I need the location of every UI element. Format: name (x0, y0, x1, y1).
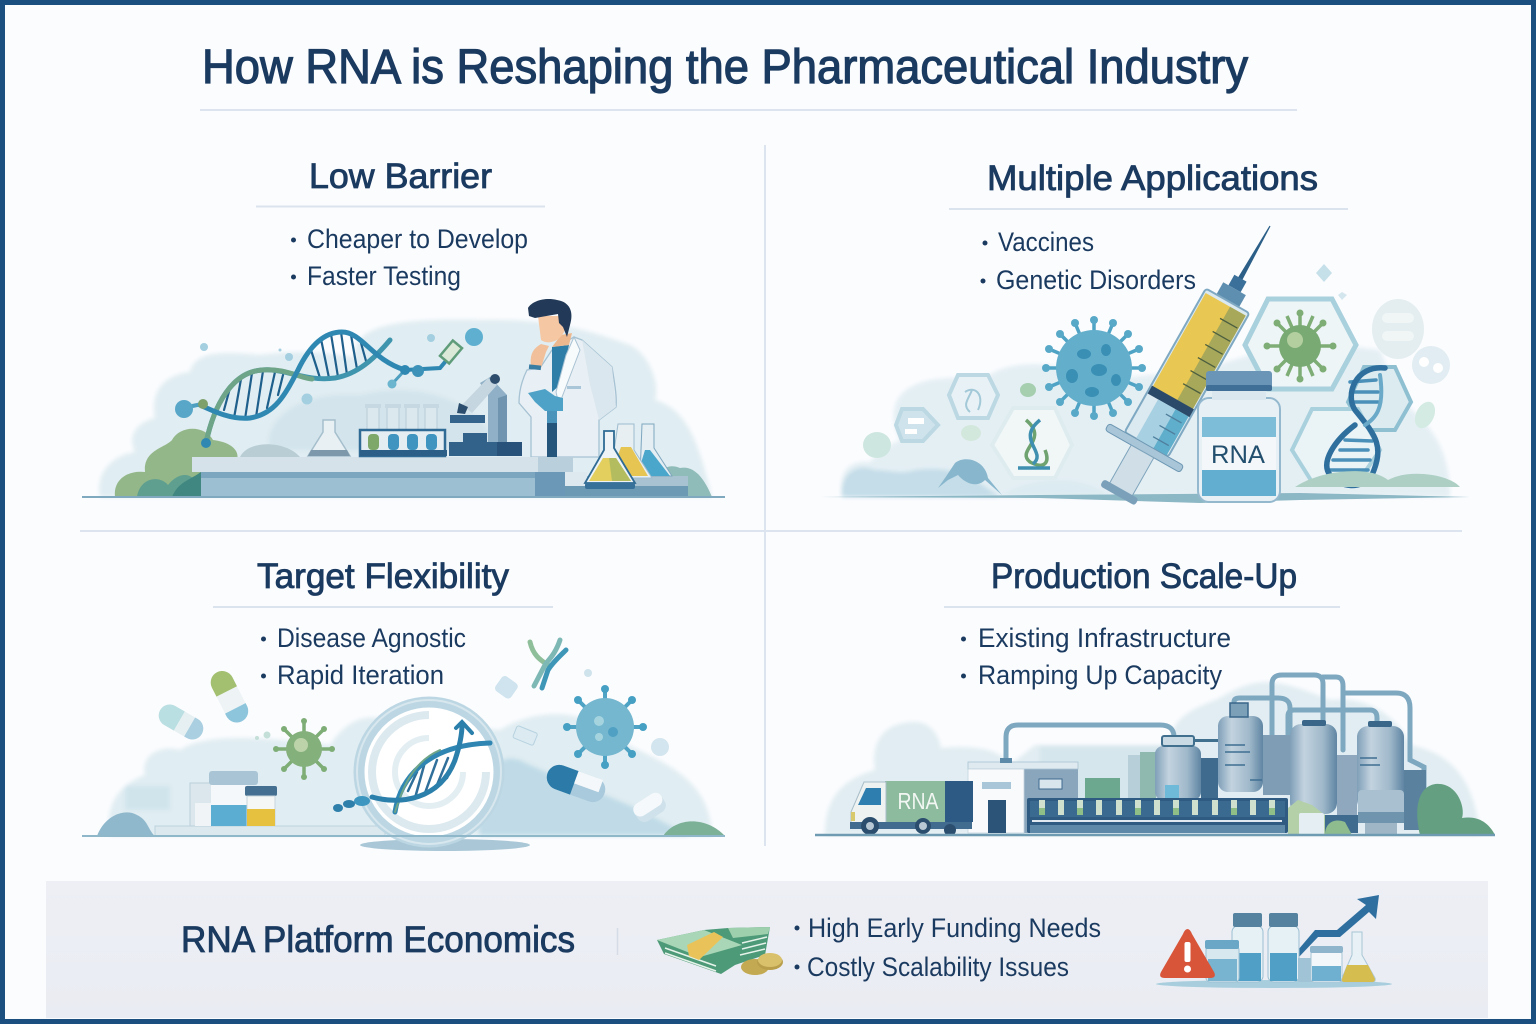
panel: target flexibility (82, 557, 725, 851)
icon: green bushes (1325, 784, 1495, 835)
bullet list: production scale-up (961, 623, 1231, 690)
bullet list: target flexibility (261, 623, 466, 690)
icon: green virus (1264, 310, 1336, 382)
ground line (815, 834, 1495, 836)
icon: DNA in target (333, 722, 490, 812)
icon: small tablets (255, 669, 669, 756)
icon: white tablet (631, 790, 669, 825)
icon: vials and flask (1156, 913, 1392, 988)
bullet list: low barrier: Cheaper to Develop (307, 224, 528, 254)
icon: green capsule (207, 667, 252, 726)
illustration: background clouds (825, 682, 1480, 835)
icon: syringe (1080, 205, 1307, 517)
icon: pale capsule (155, 700, 207, 744)
icon: laboratory bench (192, 457, 587, 497)
ground line (82, 496, 725, 498)
icon: warning triangle (1160, 929, 1215, 978)
panel: production scale-up (815, 557, 1495, 836)
title: How RNA is Reshaping the Pharmaceutical Industry (202, 41, 1248, 94)
bullet list: multiple applications (980, 227, 1196, 295)
heading: multiple applications: Multiple Applications (987, 159, 1318, 198)
bullet list: economics: Costly Scalability Issues (807, 952, 1069, 982)
icon: green hill (1295, 471, 1460, 487)
icon: magnifier target ring (357, 700, 530, 851)
icon: conical flask (308, 420, 350, 456)
icon: antibody (530, 640, 566, 688)
icon: blue virus (563, 685, 647, 769)
icon: scientist (519, 299, 616, 457)
icon: small DNA in hexagon (1018, 420, 1050, 468)
ground line (820, 493, 1470, 503)
icon: conveyor line with bottles (1027, 798, 1288, 833)
icon: tank 1 (1155, 736, 1218, 800)
icon: delivery truck (850, 781, 973, 836)
icon: blue virus (1042, 316, 1146, 420)
illustration: background clouds (99, 320, 712, 497)
icon: test tube rack (360, 404, 447, 456)
bullet list: multiple applications: Genetic Disorders (996, 265, 1196, 295)
illustration: background clouds (109, 714, 712, 836)
illustration: green bushes (115, 429, 712, 497)
label: RNA: RNA (898, 788, 939, 814)
heading: target flexibility: Target Flexibility (257, 557, 509, 596)
heading: low barrier: Low Barrier (309, 157, 492, 196)
icon: microscope (449, 374, 522, 456)
icon: right hill (663, 821, 725, 836)
icon: money stack (657, 927, 783, 975)
bullet list: multiple applications: Vaccines (998, 227, 1094, 257)
heading: production scale-up: Production Scale-Up (991, 557, 1297, 596)
bullet list: production scale-up: Existing Infrastructure (978, 623, 1231, 653)
bullet list: target flexibility: Rapid Iteration (277, 660, 444, 690)
icon: medicine bottles (190, 771, 277, 826)
bullet list: low barrier: Faster Testing (307, 261, 461, 291)
icon: blue capsule (543, 761, 609, 806)
panel: multiple applications (820, 159, 1470, 517)
bullet list: target flexibility: Disease Agnostic (277, 623, 466, 653)
icon: RNA vial (1198, 371, 1280, 502)
icon: pipes (1006, 675, 1424, 795)
illustration: background clouds (841, 340, 1450, 497)
icon: tank 4 (1357, 721, 1426, 835)
bullet list: low barrier (291, 224, 528, 291)
icon: large DNA ribbon (1327, 368, 1385, 486)
panel: RNA platform economics (46, 881, 1488, 1018)
icon: coloured flasks on tray (565, 424, 688, 497)
icon: tank 3 (1290, 720, 1358, 833)
bullet list: production scale-up: Ramping Up Capacity (978, 660, 1222, 690)
icon: hexagons (896, 299, 1411, 482)
icon: floating shapes (863, 264, 1450, 495)
bullet list: economics: High Early Funding Needs (808, 913, 1101, 943)
label: RNA: RNA (1211, 441, 1265, 469)
icon: green virus (273, 718, 335, 780)
icon: tank 2 (1218, 703, 1290, 795)
icon: DNA helix (175, 328, 483, 448)
panel: low barrier (82, 157, 725, 497)
icon: rising arrow (1298, 895, 1379, 958)
ground line (82, 835, 725, 837)
icon: green and white block (1288, 800, 1325, 835)
heading: RNA platform economics: RNA Platform Economics (181, 919, 575, 960)
icon: factory building (968, 758, 1078, 833)
icon: left hill (97, 812, 155, 836)
icon: green units (1085, 752, 1156, 798)
bullet list: economics (794, 913, 1101, 982)
icon: tray (155, 826, 385, 836)
